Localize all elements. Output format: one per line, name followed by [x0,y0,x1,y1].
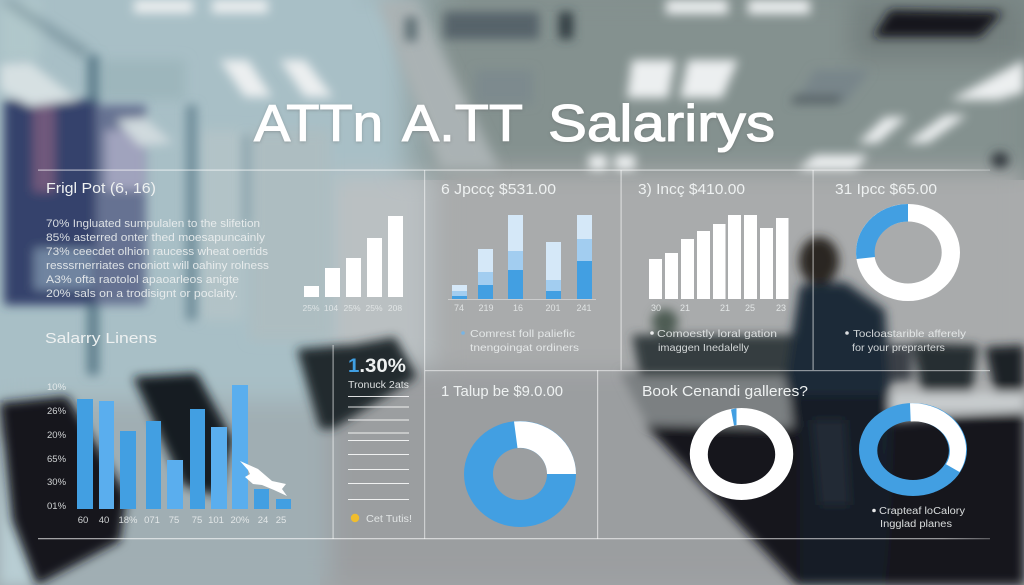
note: white bars: imaggen Inedalelly [658,342,750,354]
bar chart: salary lines: 20% [47,430,67,441]
stacked bar chart [448,215,596,313]
stacked bar chart: 16 [513,303,523,313]
donut chart: white [690,408,793,500]
note: stacked bars [461,328,579,354]
heading: Book Cenandi: Book Cenandi galleres? [642,383,808,400]
window frames [87,55,99,375]
stacked bar chart: 241 [576,303,592,313]
bar chart: overview [302,216,403,313]
bar chart: overview: 208 [388,303,402,313]
panel: salary lines [45,330,291,526]
bar chart: salary lines: 071 [144,515,160,526]
ceiling vents [444,12,539,39]
note: white bars: Comoestly loral gation [657,328,777,340]
text block: overview: A3% ofta raotolol apaoarleos anigte [46,274,239,286]
text block: overview: 20% sals on a trodisignt or poclaity. [46,288,238,300]
bar chart: salary lines: 40 [99,515,109,526]
note: top-right donut: for your preprarters [852,342,945,354]
text block: overview: 73% ceecdet olhion raucess wheat oertids [46,246,269,258]
stacked bar chart: 219 [478,303,494,313]
panel: bottom donut [441,383,576,527]
note: blue donut: Crapteaf loCalory [879,506,965,517]
bar chart: salary lines: 65% [47,454,67,465]
note: blue donut [872,506,965,530]
bar chart: white bars: 25 [745,303,755,313]
panel grid lines [38,170,990,539]
bar chart: white bars: 30 [651,303,661,313]
stat: 1.30%: 1.30% [348,356,406,377]
bar chart: salary lines: 10% [47,382,67,393]
bar chart: salary lines: 24 [258,515,268,526]
bar chart: salary lines: 75 [169,515,179,526]
text block: overview [46,218,270,300]
bar chart: white bars: 21 [680,303,690,313]
heading: white bars: 3) Incç $410.00 [638,181,745,198]
heading: top-right donut: 31 Ipcc $65.00 [835,181,937,198]
note: top-right donut: Tocloastarible afferely [853,328,967,340]
bar chart: salary lines: 30% [47,477,67,488]
bar chart: salary lines: 60 [78,515,88,526]
list lines [348,396,409,500]
bar chart: salary lines: 25 [276,515,286,526]
note: stacked bars: tnengoingat ordiners [470,342,579,354]
title [254,95,775,153]
poster [4,100,96,305]
bar chart: salary lines: 101 [208,515,224,526]
bar chart: overview: 25% [365,303,383,313]
icon: white plane [240,461,287,496]
panel: side stats [348,356,412,525]
panel: salary overview [46,180,403,313]
note: stacked bars: Comrest foll paliefic [470,328,575,340]
stat label: Tronuck 2ats [348,380,409,391]
heading: stacked bars: 6 Jpccç $531.00 [441,181,556,198]
note: white bars [650,328,777,354]
panel: top-right donut [835,181,967,354]
text block: overview: 70% Ingluated sumpulalen to the slifetion [46,218,260,230]
bar chart: white bars: 21 [720,303,730,313]
bar chart: salary lines [47,382,291,526]
heading: overview: Frigl Pot (6, 16) [46,180,156,197]
bar chart: salary lines: 18% [118,515,138,526]
bar chart: overview: 25% [343,303,361,313]
bar chart: salary lines: 01% [47,501,67,512]
bar chart: salary lines: 26% [47,406,67,417]
legend: yellow dot [351,514,412,525]
stacked bar chart: 201 [545,303,561,313]
title: Salarirys [548,95,775,153]
legend: yellow dot: Cet Tutis! [366,514,412,525]
title: A.TT [402,95,523,153]
donut chart: blue [859,403,967,496]
text block: overview: 85% asterred onter thed moesapuncainly [46,232,266,244]
donut chart: top-right [856,204,960,301]
donut chart: bottom [464,421,576,527]
panel: stacked bars [441,181,596,354]
bar chart: overview: 104 [324,303,338,313]
text block: overview: resssrnerriates cnoniott will oahiny rolness [46,260,270,272]
note: top-right donut [845,328,967,354]
stacked bar chart: 74 [454,303,464,313]
ceiling lights [0,0,1024,170]
title: ATTn [254,95,383,153]
heading: bottom donut: 1 Talup be $9.0.00 [441,383,563,400]
bar chart: salary lines: 75 [192,515,202,526]
person [785,237,890,585]
bar chart: overview: 25% [302,303,320,313]
panel: white bars [638,181,788,354]
heading: salary lines: Salarry Linens [45,330,157,347]
floor, table and chairs [0,237,1024,585]
panel: Book Cenandi [642,383,967,530]
bar chart: white bars [649,215,788,313]
note: blue donut: Ingglad planes [880,519,952,530]
bar chart: white bars: 23 [776,303,786,313]
bar chart: salary lines: 20% [230,515,250,526]
unblurred colour zones so blur never shows the page edge [0,0,1024,180]
